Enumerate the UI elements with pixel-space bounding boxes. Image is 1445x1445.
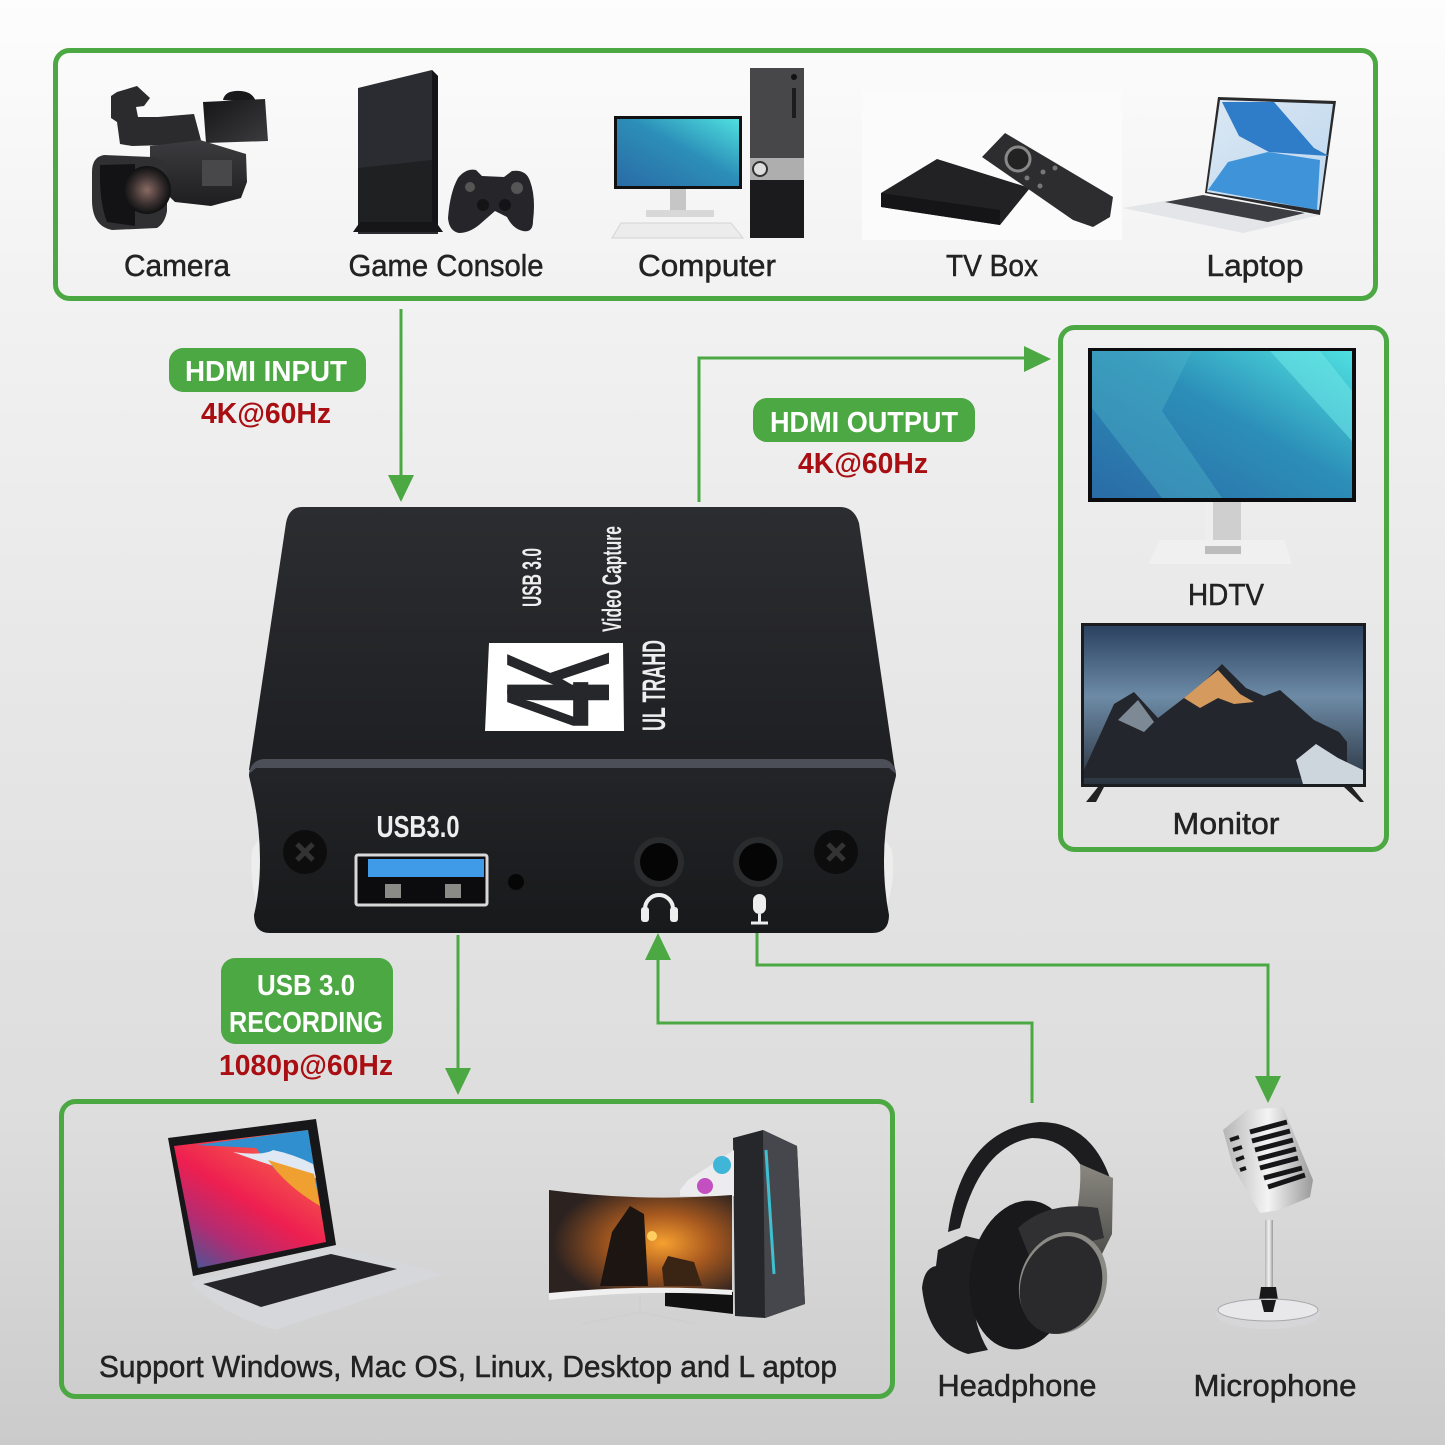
icon: gaming PC bbox=[549, 1130, 805, 1324]
label: Laptop: Laptop bbox=[1206, 248, 1304, 283]
icon: MacBook bbox=[168, 1119, 443, 1330]
label: Microphone: Microphone bbox=[1194, 1368, 1356, 1403]
arrow: microphone bbox=[757, 933, 1281, 1103]
device labels: Video Capture bbox=[597, 526, 627, 632]
device front bbox=[249, 759, 896, 933]
badge: USB recording bbox=[221, 958, 393, 1044]
label: Camera: Camera bbox=[124, 248, 231, 283]
label: Computer: Computer bbox=[638, 248, 776, 283]
label: TV Box: TV Box bbox=[946, 248, 1038, 283]
icon: game console bbox=[353, 70, 534, 234]
device labels: USB 3.0 bbox=[517, 548, 547, 607]
panel: output displays bbox=[1060, 328, 1386, 850]
panel: input sources bbox=[56, 50, 1376, 298]
text: OS support: Support Windows, Mac OS, Linux, Desktop and L aptop bbox=[99, 1349, 837, 1384]
badge: HDMI input: HDMI INPUT bbox=[185, 356, 347, 388]
capture device bbox=[249, 507, 896, 933]
badge: HDMI output bbox=[753, 398, 975, 442]
device top bbox=[249, 507, 895, 770]
icon: microphone bbox=[1216, 1107, 1320, 1329]
label: Monitor: Monitor bbox=[1172, 806, 1280, 841]
device labels bbox=[517, 526, 672, 731]
headphone jack bbox=[634, 837, 684, 887]
icon: monitor bbox=[1081, 623, 1366, 802]
badge: USB recording: USB 3.0 bbox=[257, 970, 355, 1002]
badge: HDMI input bbox=[169, 348, 366, 392]
mic jack bbox=[733, 837, 783, 887]
text: recording rate: 1080p@60Hz bbox=[219, 1050, 393, 1082]
glare left bbox=[251, 838, 261, 908]
icon: headphone symbol bbox=[641, 895, 678, 922]
USB port bbox=[356, 855, 487, 905]
panel: recording hosts bbox=[62, 1102, 892, 1396]
text: input rate: 4K@60Hz bbox=[201, 398, 331, 430]
arrow: HDMI output bbox=[699, 346, 1051, 502]
label: Headphone: Headphone bbox=[938, 1368, 1096, 1403]
glare right bbox=[882, 838, 893, 908]
icon: mic symbol bbox=[751, 894, 768, 923]
4K logo: 4 bbox=[476, 682, 641, 727]
screw right bbox=[814, 830, 858, 874]
device labels: UL TRAHD bbox=[636, 640, 672, 731]
label: HDTV: HDTV bbox=[1188, 577, 1264, 612]
badge: USB recording: RECORDING bbox=[229, 1007, 383, 1039]
icon: HDTV bbox=[1088, 348, 1356, 564]
icon: laptop bbox=[1123, 97, 1336, 233]
arrow: headphone bbox=[645, 933, 1032, 1103]
label: USB3.0: USB3.0 bbox=[376, 809, 460, 844]
badge: HDMI output: HDMI OUTPUT bbox=[770, 407, 958, 439]
4K logo bbox=[476, 643, 641, 731]
icon: camera bbox=[92, 86, 268, 230]
LED bbox=[508, 874, 524, 890]
arrow: USB recording bbox=[445, 935, 471, 1095]
icon: TV box bbox=[862, 90, 1122, 240]
label: Game Console: Game Console bbox=[348, 248, 544, 283]
screw left bbox=[283, 830, 327, 874]
front top edge bbox=[249, 759, 896, 774]
icon: headphone bbox=[922, 1122, 1121, 1358]
icon: computer bbox=[612, 68, 804, 238]
4K logo: K bbox=[476, 652, 641, 698]
text: output rate: 4K@60Hz bbox=[798, 448, 928, 480]
arrow: HDMI input bbox=[388, 309, 414, 502]
